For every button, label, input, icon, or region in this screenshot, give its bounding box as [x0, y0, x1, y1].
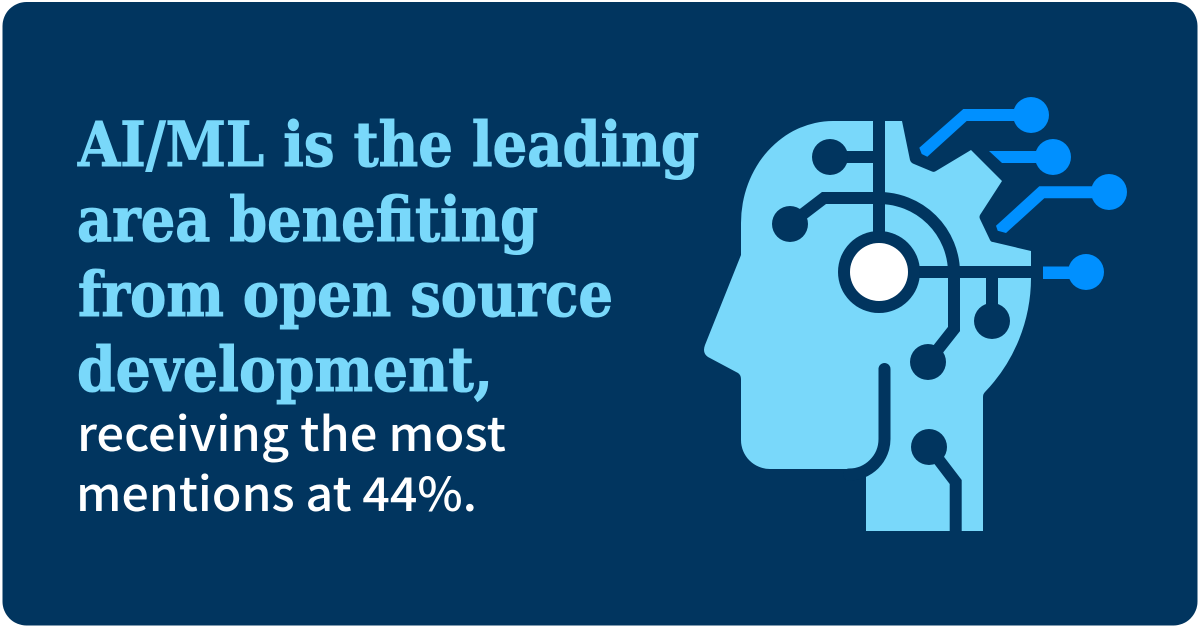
circuit nodes: [772, 139, 1010, 465]
supporting text: receiving the most: [77, 396, 506, 465]
blue outgoing connectors: [919, 97, 1127, 290]
neural circuit traces: [790, 121, 1032, 532]
heading: development,: [77, 333, 493, 406]
heading: AI/ML is the leading: [77, 108, 699, 181]
head silhouette: [704, 121, 1031, 531]
icon: AI head with circuits: [704, 97, 1127, 532]
heading: area benefiting: [77, 183, 538, 256]
heading: from open source: [78, 258, 613, 331]
central white core: [850, 243, 908, 301]
supporting text: [76, 396, 506, 525]
heading: [77, 108, 699, 406]
supporting text: mentions at 44%.: [76, 456, 477, 525]
